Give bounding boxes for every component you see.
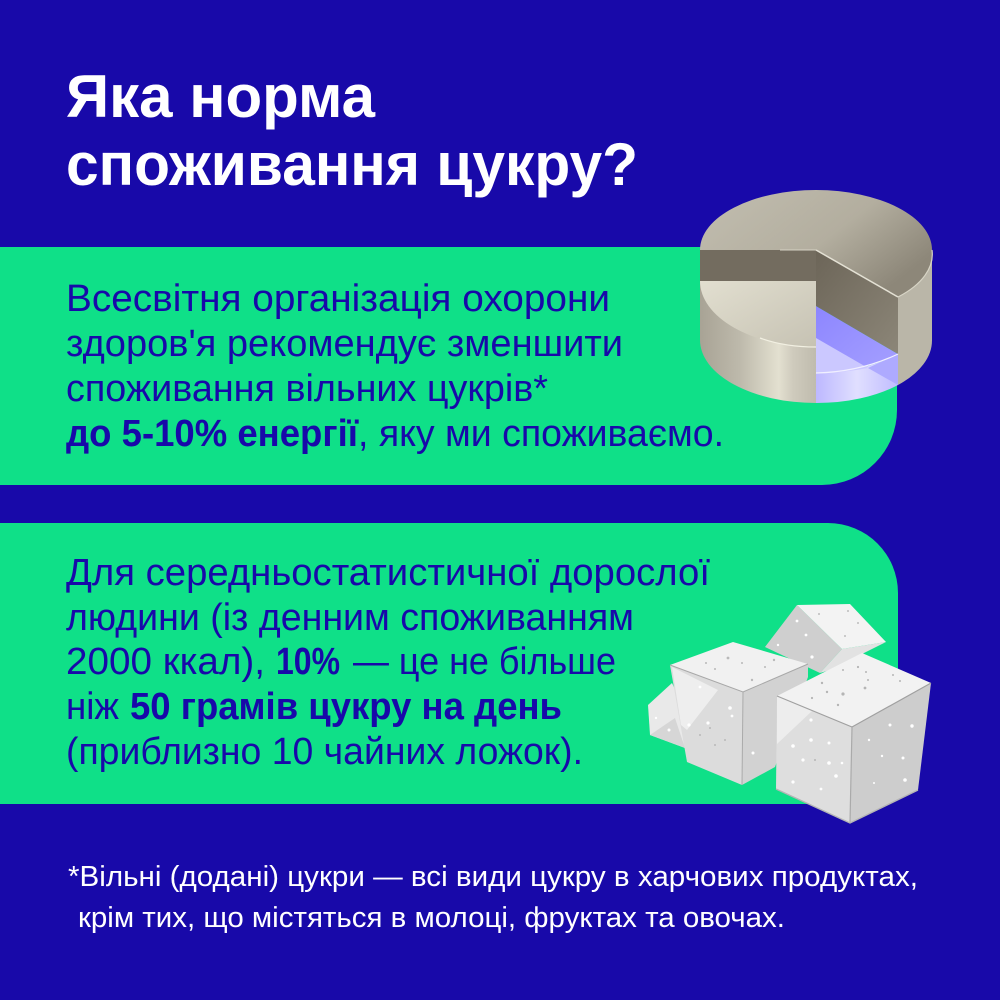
title: Яка норма xyxy=(66,63,376,130)
middle cube xyxy=(670,642,808,785)
front cube xyxy=(776,653,931,823)
title xyxy=(66,63,638,198)
text block: daily sugar amount: ніж xyxy=(66,686,120,728)
title: споживання цукру? xyxy=(66,131,638,198)
text block: WHO recommendation: , яку ми споживаємо. xyxy=(358,413,724,455)
text block: daily sugar amount: 10% xyxy=(276,641,340,683)
icon: sugar cubes xyxy=(648,604,931,823)
small left cube xyxy=(648,683,685,748)
text block: daily sugar amount: Для середньостатистичної дорослої xyxy=(66,552,710,594)
icon: pie cylinder with a 10% slice xyxy=(700,190,932,403)
text block: daily sugar amount: людини (із денним споживанням xyxy=(66,597,634,639)
footnote xyxy=(68,861,918,934)
text block: daily sugar amount: — це не більше xyxy=(353,641,616,683)
text block: WHO recommendation xyxy=(66,278,724,455)
panel: WHO recommendation xyxy=(0,247,897,485)
footnote: крім тих, що містяться в молоці, фруктах та овочах. xyxy=(78,902,785,934)
text block: WHO recommendation: здоров'я рекомендує зменшити xyxy=(66,323,623,365)
panel: daily sugar amount xyxy=(0,523,898,804)
text block: daily sugar amount xyxy=(66,552,710,773)
text block: daily sugar amount: 2000 ккал), xyxy=(66,641,265,683)
text block: WHO recommendation: Всесвітня організація охорони xyxy=(66,278,610,320)
text block: WHO recommendation: до 5-10% енергії xyxy=(66,413,359,455)
text block: daily sugar amount: (приблизно 10 чайних ложок). xyxy=(66,731,583,773)
text block: daily sugar amount: 50 грамів цукру на день xyxy=(130,686,562,728)
text block: WHO recommendation: споживання вільних цукрів* xyxy=(66,368,548,410)
footnote: *Вільні (додані) цукри — всі види цукру в харчових продуктах, xyxy=(68,861,918,893)
back cube xyxy=(765,604,886,673)
